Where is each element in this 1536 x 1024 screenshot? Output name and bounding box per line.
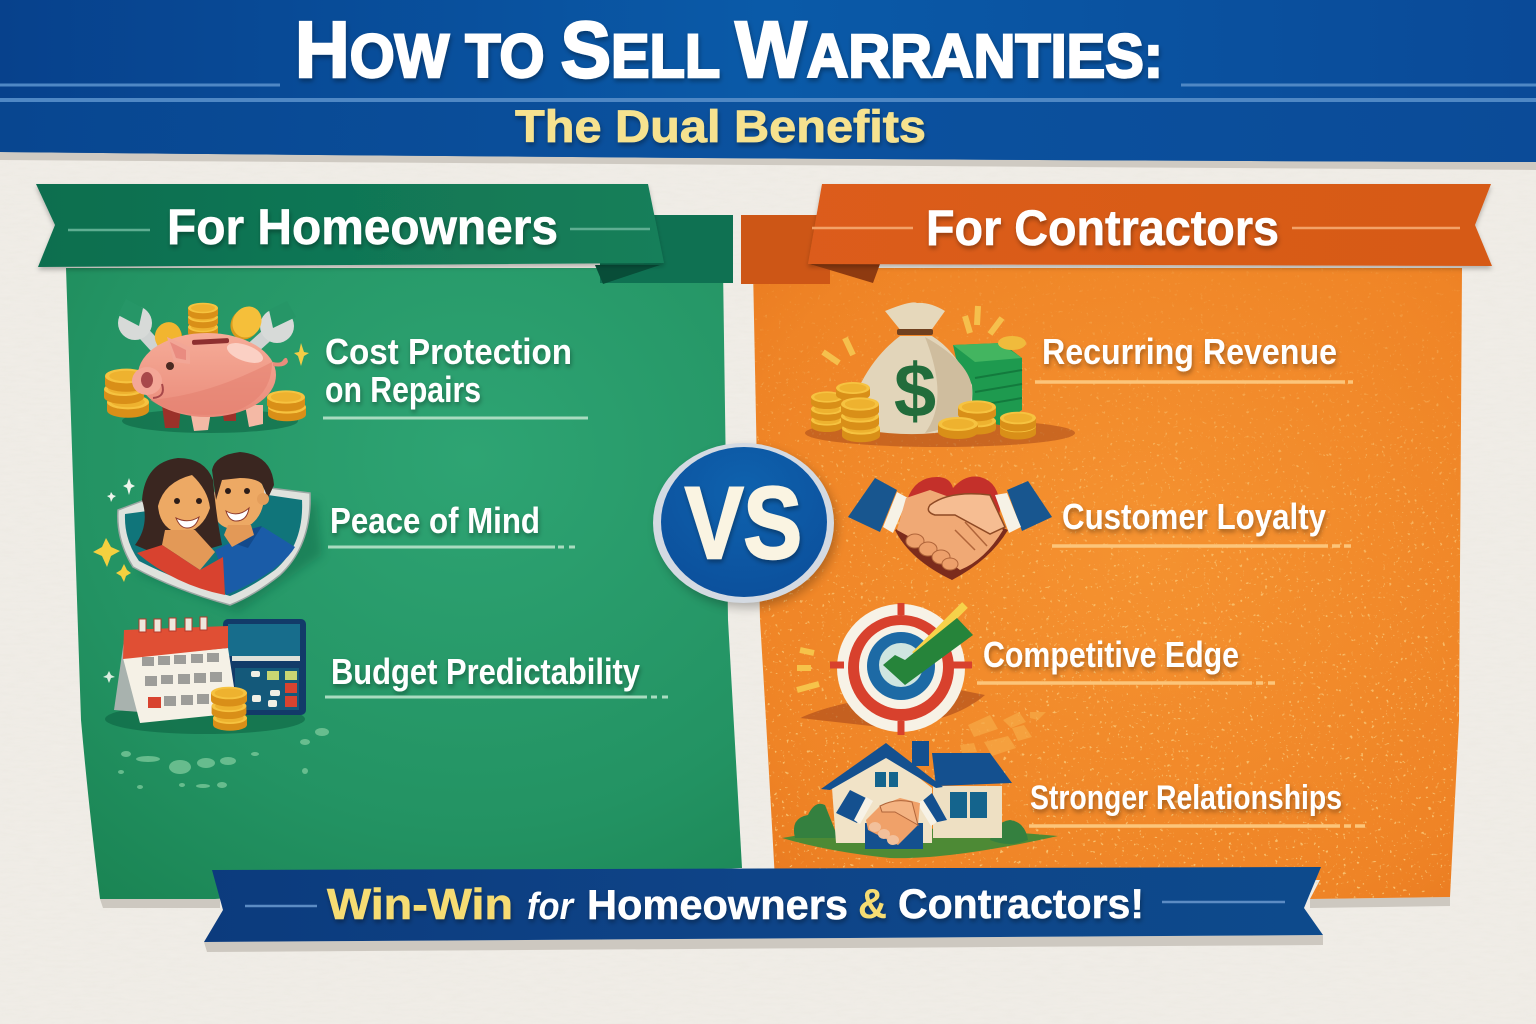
VS badge: VS [685,466,802,580]
banner text: for [527,886,575,928]
text: Customer Loyalty: Customer Loyalty [1062,496,1326,537]
panel background green [66,215,742,908]
icon: money bag, cash and coins: $ [894,349,936,434]
text: Cost Protection on Repairs: Cost Protection [325,331,572,372]
banner text: Win-Win [327,880,513,929]
bottom banner [204,867,1323,952]
ribbon: For Homeowners [36,184,664,267]
subtitle: The Dual Benefits [515,101,926,152]
text: Peace of Mind: Peace of Mind [330,500,540,541]
text: Cost Protection on Repairs: on Repairs [325,369,481,410]
ribbon: For Contractors [808,184,1492,266]
paint splashes [118,728,329,789]
banner text: Contractors! [898,880,1144,927]
icon: handshake over heart [848,476,1052,580]
ribbon: For Homeowners: For Homeowners [167,199,558,255]
icon: piggy bank with wrenches and coins [104,299,309,433]
icon: calendar and calculator [103,617,306,734]
title: HOW TO SELL WARRANTIES: [295,5,1163,94]
VS badge [653,443,837,608]
wrenches [136,325,275,360]
text: Budget Predictability: Budget Predictability [331,651,640,692]
icon: house with handshake [782,741,1058,858]
panel: contractors [741,184,1492,908]
text: Competitive Edge: Competitive Edge [983,634,1239,675]
icon: money bag, cash and coins [805,302,1075,447]
banner text: Homeowners [587,881,848,928]
icon: target with checkmark [797,603,985,735]
panel background orange [741,215,1465,908]
text: Cost Protection on Repairs [325,331,572,410]
panel: homeowners [36,184,742,908]
header band [0,0,1536,170]
text: Recurring Revenue: Recurring Revenue [1042,331,1337,372]
banner text [327,880,1144,929]
ribbon: For Contractors: For Contractors [926,200,1279,256]
text: Stronger Relationships: Stronger Relationships [1030,779,1342,817]
banner text: & [858,880,887,927]
icon: couple in shield [93,452,322,612]
